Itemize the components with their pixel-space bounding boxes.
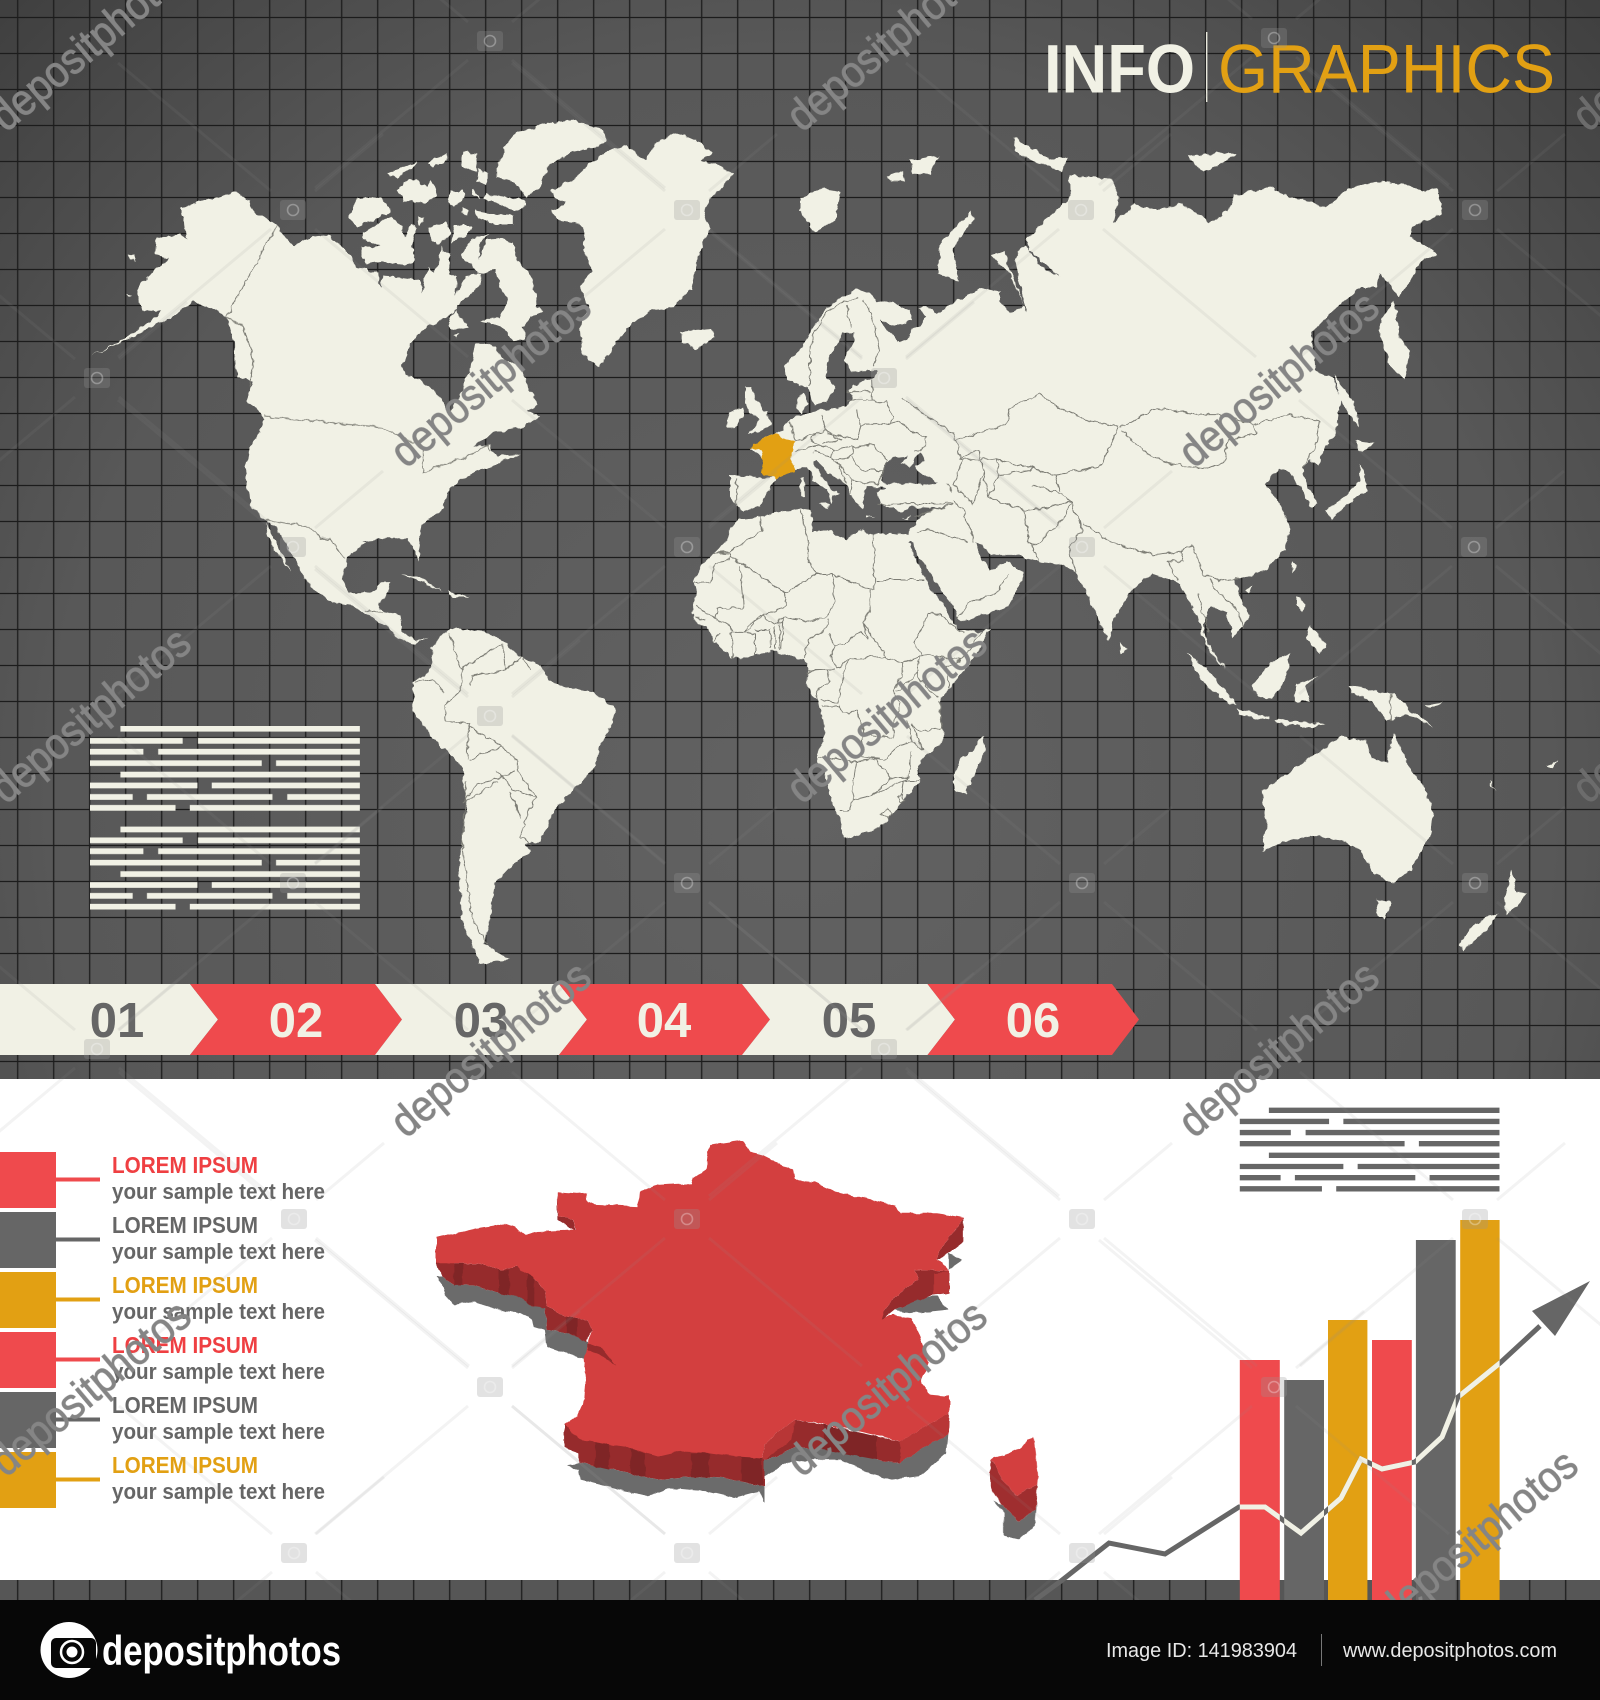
legend item 1: your sample text here (112, 1179, 325, 1204)
arctic archipelago (348, 120, 607, 342)
world map (90, 120, 1559, 963)
footer logo wordmark: depositphotos (102, 1627, 341, 1674)
depositphotos watermarks over content: depositphotos (777, 618, 996, 813)
step 05: 05 (822, 994, 876, 1048)
image id: Image ID: 141983904 (1106, 1640, 1297, 1662)
depositphotos watermarks over content: depositphotos (381, 952, 600, 1147)
france side walls (436, 1192, 963, 1486)
bar chart with trend arrow (1035, 1220, 1590, 1600)
madagascar (953, 735, 985, 795)
legend item 1: LOREM IPSUM (112, 1152, 258, 1178)
legend item 2: LOREM IPSUM (112, 1212, 258, 1238)
baja california (265, 522, 291, 571)
step 06: 06 (1006, 994, 1060, 1048)
central and south america (273, 523, 615, 963)
depositphotos watermarks over content: depositphotos (1169, 282, 1388, 477)
legend item 4: your sample text here (112, 1359, 325, 1384)
faint watermarks on dark background: depositphotos (777, 618, 996, 813)
website url: www.depositphotos.com (1342, 1640, 1557, 1662)
highlighted france on world map (749, 432, 796, 478)
south america (413, 628, 615, 963)
northern mainland canada (353, 247, 482, 327)
corsica side (990, 1460, 1037, 1521)
asian mainland (907, 175, 1442, 670)
european borders (737, 298, 1000, 505)
dark strip under white panel (0, 1580, 1600, 1600)
legend item 3: your sample text here (112, 1299, 325, 1324)
legend item 6: your sample text here (112, 1479, 325, 1504)
african borders (695, 510, 982, 810)
step 01 (0, 984, 218, 1055)
trend line over bars (1240, 1360, 1500, 1536)
footer divider (1321, 1634, 1322, 1666)
step 03 (375, 984, 587, 1055)
faint watermarks on dark background: depositphotos (1169, 952, 1388, 1147)
alaskan islands (125, 255, 135, 296)
depositphotos watermarks over content: depositphotos (777, 1291, 996, 1486)
australia (1262, 733, 1434, 918)
bars (1240, 1220, 1500, 1600)
legend item 6 (0, 1452, 325, 1508)
step 06 (928, 984, 1139, 1055)
step 01: 01 (90, 994, 144, 1048)
numbered arrow banner (0, 984, 1139, 1055)
france lighter wall facets (762, 1272, 949, 1463)
africa (692, 508, 990, 838)
text block placeholder bars: gray (1240, 1108, 1499, 1192)
faint watermarks on dark background (0, 0, 1600, 1147)
legend item 2 (0, 1212, 325, 1268)
latin america borders (365, 609, 536, 944)
title divider (1206, 32, 1207, 102)
france mainland (436, 1140, 963, 1503)
legend item 2: your sample text here (112, 1239, 325, 1264)
depositphotos watermarks over content: depositphotos (381, 282, 600, 477)
legend item 3 (0, 1272, 325, 1328)
north american borders (227, 225, 492, 558)
north america (90, 192, 540, 571)
step 02: 02 (269, 994, 323, 1048)
footer logo icon (40, 1622, 98, 1678)
legend item 6: LOREM IPSUM (112, 1452, 258, 1478)
footer bar (0, 1600, 1600, 1700)
corsica top (990, 1437, 1038, 1496)
step 05 (742, 984, 955, 1055)
corsica (990, 1437, 1038, 1539)
legend item 5: your sample text here (112, 1419, 325, 1444)
greenland (552, 133, 733, 367)
european mainland (730, 287, 1000, 512)
legend item 4 (0, 1332, 325, 1388)
faint watermarks on dark background: depositphotos (381, 282, 600, 477)
white panel (0, 1079, 1600, 1580)
legend (0, 1152, 325, 1508)
3d map of france (436, 1140, 1038, 1539)
europe (682, 287, 1000, 519)
new zealand (1459, 871, 1527, 950)
title: graphics: GRAPHICS (1218, 30, 1555, 108)
african mainland (692, 508, 990, 838)
gironde estuary (586, 1343, 616, 1366)
title (1044, 30, 1555, 108)
arrow head (1532, 1281, 1590, 1336)
arctic canada and greenland (348, 120, 733, 367)
depositphotos watermarks over content: depositphotos (1169, 952, 1388, 1147)
legend item 5: LOREM IPSUM (112, 1392, 258, 1418)
text block placeholder bars: light (90, 726, 360, 910)
mexico and central america (273, 523, 428, 645)
asia (800, 137, 1559, 950)
step 02 (190, 984, 402, 1055)
caribbean islands (401, 574, 470, 597)
asian borders (877, 394, 1391, 721)
lesotho and swaziland (882, 795, 905, 819)
legend item 4: LOREM IPSUM (112, 1332, 258, 1358)
title: info: INFO (1044, 30, 1195, 108)
legend item 3: LOREM IPSUM (112, 1272, 258, 1298)
france shadow (436, 1253, 963, 1503)
trend line (1035, 1326, 1540, 1600)
faint watermarks on dark background: depositphotos (1169, 282, 1388, 477)
asian and pacific islands (800, 137, 1559, 790)
step 04: 04 (637, 994, 691, 1048)
canada, usa and alaska (90, 192, 540, 562)
corsica shadow (993, 1500, 1037, 1539)
france wall facets (454, 1263, 877, 1486)
france top face (436, 1140, 963, 1458)
legend item 1 (0, 1152, 325, 1208)
step 03: 03 (454, 994, 508, 1048)
faint watermarks on dark background: depositphotos (381, 952, 600, 1147)
step 04 (559, 984, 770, 1055)
legend item 5 (0, 1392, 325, 1448)
european islands (682, 328, 911, 519)
